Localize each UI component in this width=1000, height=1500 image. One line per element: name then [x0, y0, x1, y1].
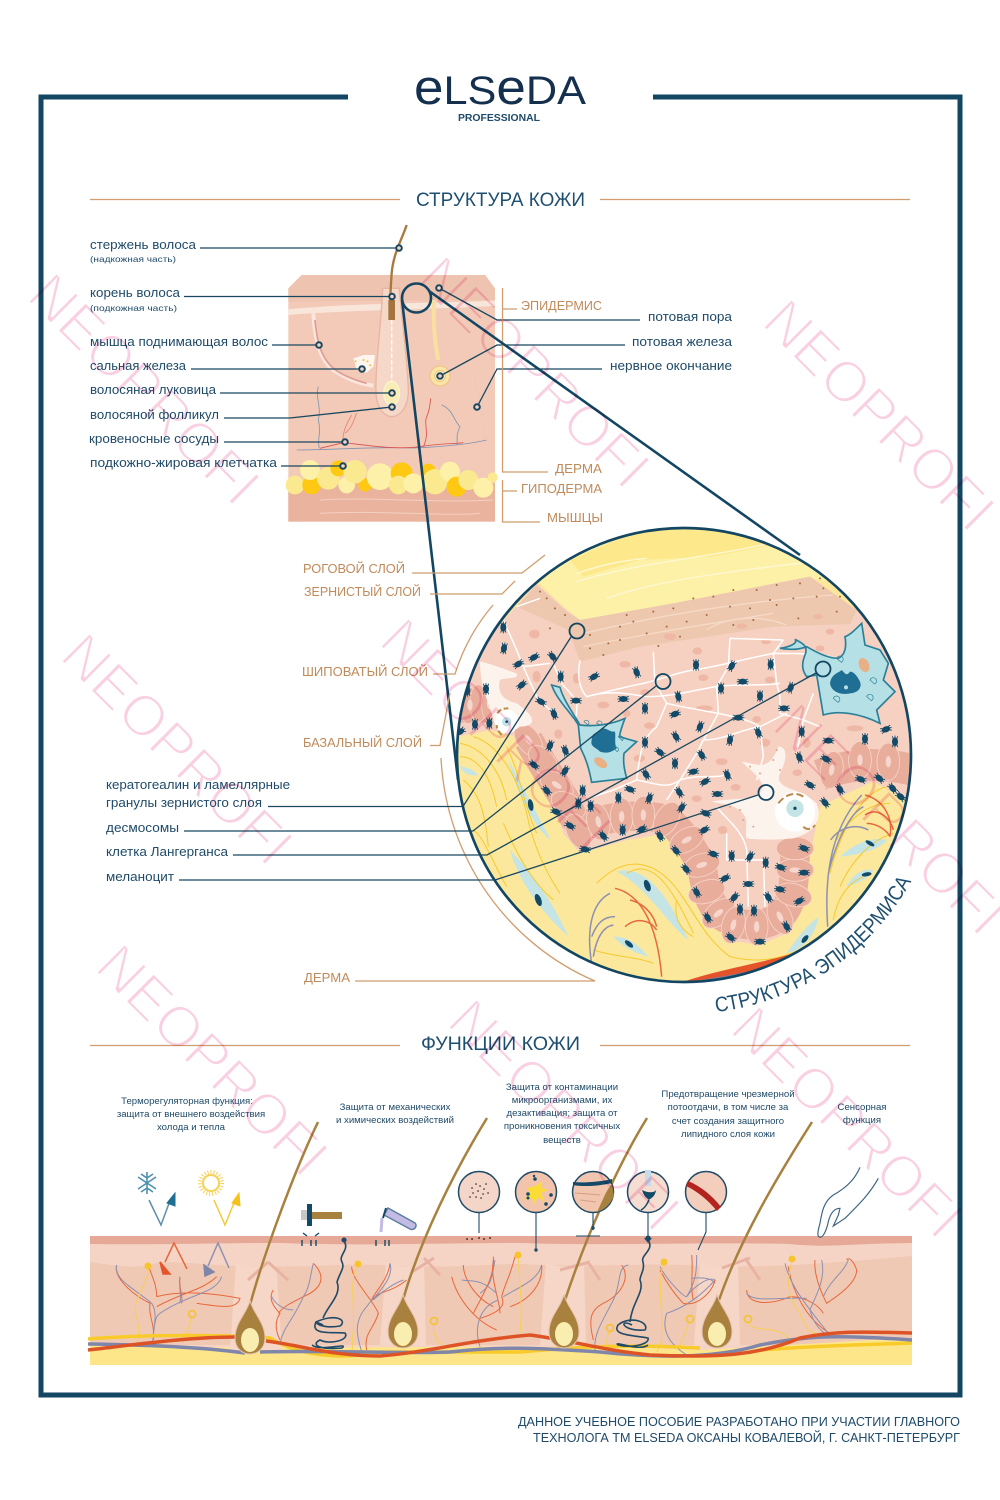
circular title: epidermis structure: СТРУКТУРА ЭПИДЕРМИСА	[716, 878, 912, 1012]
hair bulbs	[235, 1294, 732, 1354]
label: sweat gland: потовая железа	[632, 335, 732, 349]
label: hair root: (подкожная часть)	[90, 303, 177, 313]
dermis background	[458, 529, 906, 981]
bottom vessels	[686, 954, 790, 981]
caption: thermoregulation: Терморегуляторная функция:	[121, 1096, 253, 1107]
caption: contamination protection: микроорганизмами, их	[512, 1095, 612, 1106]
circle: lipid layer	[686, 1172, 726, 1250]
label: blood vessels	[89, 432, 348, 446]
caption: sensory function: Сенсорная	[838, 1102, 886, 1113]
caption: thermoregulation: защита от внешнего воздействия	[117, 1109, 265, 1120]
caption: mechanical protection: Защита от механических	[340, 1102, 451, 1113]
icon: hand	[818, 1167, 878, 1237]
temperature arrows under skin	[160, 1243, 229, 1276]
label: hair bulb: волосяная луковица	[90, 383, 216, 397]
layer: hypodermis: ГИПОДЕРМА	[521, 481, 602, 496]
desmosomes	[453, 621, 907, 945]
caption: contamination protection: проникновения токсичных	[504, 1121, 620, 1132]
epidermis layer labels	[302, 561, 428, 985]
hair shaft	[390, 225, 407, 320]
blood vessels	[297, 367, 488, 450]
hair bulb	[384, 381, 400, 405]
label: subcutaneous fat: подкожно-жировая клетчатка	[90, 456, 277, 470]
layer: stratum granulosum: ЗЕРНИСТЫЙ СЛОЙ	[304, 584, 421, 599]
layer: epidermis: ЭПИДЕРМИС	[521, 298, 602, 313]
label: hair root: корень волоса	[90, 286, 180, 300]
cell pigment spots	[529, 614, 863, 834]
icon: test tube	[376, 1208, 416, 1246]
label: subcutaneous fat	[90, 456, 346, 470]
follicle halos	[230, 1262, 282, 1350]
icon: snowflake with arrow	[138, 1172, 175, 1225]
labels: skin structure, left	[89, 238, 402, 470]
capillaries	[116, 1260, 500, 1352]
basal cell layer	[460, 685, 913, 946]
logo: eLSeDA	[414, 61, 586, 115]
watermarks: NEOPROFI	[16, 261, 272, 518]
label: keratohyalin granules: гранулы зернистого слоя	[106, 796, 262, 810]
tan bracket arcs around circle	[355, 555, 595, 981]
caption: sensory function: функция	[843, 1115, 881, 1126]
label: sebaceous gland	[90, 359, 365, 373]
capillary loops	[590, 795, 893, 977]
credit footer	[518, 1414, 960, 1445]
spinous layer	[450, 577, 920, 945]
caption: thermoregulation: холода и тепла	[157, 1122, 226, 1133]
dermis fibres and light-blue fibroblasts	[460, 737, 893, 963]
label: sebaceous gland: сальная железа	[90, 359, 186, 373]
label: hair shaft	[90, 238, 402, 264]
label: desmosomes: десмосомы	[106, 821, 179, 835]
layer: stratum corneum: РОГОВОЙ СЛОЙ	[303, 561, 405, 576]
icon: sun with arrow	[200, 1172, 240, 1225]
label: hair follicle	[90, 404, 395, 422]
label: hair shaft: (надкожная часть)	[90, 254, 176, 264]
layer: epidermis	[502, 288, 602, 472]
label: keratohyalin granules: кератогеалин и ламеллярные	[106, 778, 290, 792]
epidermis pointer labels	[106, 624, 830, 884]
label: desmosomes	[106, 674, 670, 835]
epidermis and dermis	[288, 275, 495, 522]
circle: keratin barrier	[572, 1172, 614, 1236]
circle: microbes	[458, 1172, 500, 1239]
subcutaneous fat	[286, 460, 498, 498]
caption: water loss prevention: Предотвращение чрезмерной	[661, 1089, 795, 1100]
watermarks: NEOPROFI	[406, 244, 662, 501]
label: hair follicle: волосяной фолликул	[90, 408, 219, 422]
hairs	[250, 1118, 812, 1305]
heading: skin structure: СТРУКТУРА КОЖИ	[416, 190, 585, 211]
page frame	[41, 97, 960, 1395]
label: melanocyte	[106, 785, 774, 884]
caption: contamination protection: Защита от контаминации	[506, 1082, 618, 1093]
label: hair bulb	[90, 383, 395, 397]
label: nerve ending: нервное окончание	[610, 359, 732, 373]
watermarks: NEOPROFI	[719, 994, 975, 1251]
circle outline	[457, 528, 911, 982]
label: nerve ending	[474, 359, 732, 410]
layer: dermis: ДЕРМА	[304, 970, 350, 985]
zoom callout lines	[402, 284, 800, 780]
skin strip illustration	[88, 1118, 912, 1365]
melanocyte left	[480, 662, 532, 735]
skin layers	[90, 1236, 912, 1365]
circle: acid mantle	[516, 1172, 556, 1252]
credit footer: ДАННОЕ УЧЕБНОЕ ПОСОБИЕ РАЗРАБОТАНО ПРИ УЧАСТИИ ГЛАВНОГО	[518, 1414, 960, 1429]
label: sweat pore	[436, 285, 732, 324]
caption: water loss prevention: потоотдачи, в том числе за	[668, 1102, 789, 1113]
caption: mechanical protection: и химических воздействий	[336, 1115, 454, 1126]
icon: hammer	[301, 1204, 342, 1246]
arrector muscle	[313, 313, 373, 386]
granular layer	[517, 577, 857, 662]
watermarks	[16, 244, 1000, 1251]
label: arrector muscle: мышца поднимающая волос	[90, 335, 268, 349]
logo: PROFESSIONAL	[458, 113, 540, 124]
label: hair root	[90, 286, 395, 313]
label: keratohyalin granules	[106, 624, 584, 810]
Langerhans cell, right	[780, 623, 895, 723]
credit footer: ТЕХНОЛОГА ТМ ELSEDA ОКСАНЫ КОВАЛЕВОЙ, Г. САНКТ-ПЕТЕРБУРГ	[533, 1430, 960, 1445]
layer: dermis: ДЕРМА	[555, 461, 602, 476]
sebaceous gland	[353, 355, 375, 373]
sweat glands	[312, 1238, 650, 1348]
receptor dots	[144, 1252, 796, 1332]
label: melanocyte: меланоцит	[106, 870, 174, 884]
epidermis circle	[440, 527, 927, 993]
melanocyte right	[712, 747, 819, 840]
labels: skin structure, right	[436, 285, 732, 410]
layer: stratum spinosum: ШИПОВАТЫЙ СЛОЙ	[302, 664, 428, 679]
label: hair shaft: стержень волоса	[90, 238, 196, 252]
label: blood vessels: кровеносные сосуды	[89, 432, 219, 446]
watermarks: NEOPROFI	[49, 621, 305, 878]
sweat gland	[434, 300, 438, 360]
layer: stratum basale: БАЗАЛЬНЫЙ СЛОЙ	[303, 735, 422, 750]
caption: contamination protection: дезактивация; защита от	[506, 1108, 618, 1119]
spinous cell membranes	[503, 598, 840, 907]
label: Langerhans cell: клетка Лангерганса	[106, 845, 228, 859]
circle: sweat pore	[628, 1170, 668, 1243]
hair follicle	[376, 288, 408, 417]
skin functions captions	[117, 1082, 886, 1146]
label: Langerhans cell	[106, 662, 830, 859]
watermarks: NEOPROFI	[368, 606, 624, 863]
watermarks: NEOPROFI	[436, 987, 692, 1244]
layer: hypodermis	[502, 480, 602, 522]
heading: skin functions: ФУНКЦИИ КОЖИ	[421, 1034, 580, 1055]
label: sweat pore: потовая пора	[648, 310, 732, 324]
layer: muscles: МЫШЦЫ	[547, 510, 603, 525]
layer labels with brackets	[502, 288, 603, 525]
caption: water loss prevention: счет создания защитного	[672, 1116, 784, 1127]
caption: contamination protection: веществ	[543, 1135, 581, 1146]
watermarks: NEOPROFI	[84, 932, 340, 1189]
skin cross-section block	[286, 225, 498, 522]
stratum corneum	[540, 540, 840, 620]
nerve and vessel trunks	[88, 1332, 912, 1356]
label: sweat gland	[437, 335, 732, 379]
caption: water loss prevention: липидного слоя кожи	[681, 1129, 775, 1140]
Langerhans cell, centre	[552, 685, 637, 782]
